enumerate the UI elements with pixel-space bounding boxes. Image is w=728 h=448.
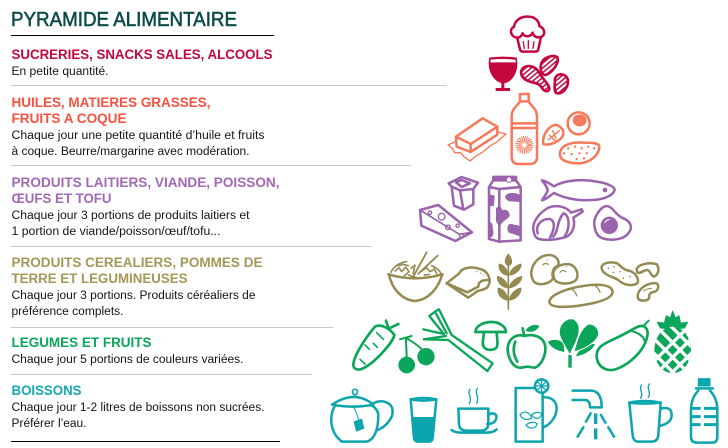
text: boissons <box>12 402 264 430</box>
panel: boissons <box>12 383 264 430</box>
icons: huiles tier <box>448 94 599 164</box>
text: produits laitiers <box>12 210 250 238</box>
text: cereales: Chaque jour 3 portions. Produits céréaliers de <box>12 290 256 302</box>
heading: huiles <box>12 95 210 126</box>
icons: sucreries tier <box>490 17 568 93</box>
icon: cupcake <box>511 17 544 52</box>
icon: teapot <box>331 389 393 442</box>
icon: baguette <box>549 285 613 307</box>
icon: bread <box>447 268 490 298</box>
icons: boissons tier right <box>573 379 717 443</box>
icon: rice bowl <box>388 252 442 301</box>
title: PYRAMIDE ALIMENTAIRE <box>11 9 237 31</box>
heading: sucreries: SUCRERIES, SNACKS SALES, ALCOOLS <box>12 47 272 62</box>
heading: produits laitiers: PRODUITS LAITIERS, VIANDE, POISSON, <box>12 175 280 190</box>
icons: boissons tier left <box>331 379 557 442</box>
text: cereales <box>12 290 256 318</box>
icon: cherries <box>398 336 435 373</box>
heading: legumes: LEGUMES ET FRUITS <box>12 335 152 350</box>
icon: cheese <box>420 205 472 241</box>
text: huiles <box>12 130 265 158</box>
heading: cereales: PRODUITS CEREALIERS, POMMES DE <box>12 255 262 270</box>
icons: cereales tier <box>447 254 658 309</box>
panel: sucreries <box>12 47 272 78</box>
icon: butter <box>448 118 506 161</box>
text: sucreries: En petite quantité. <box>12 66 109 78</box>
icon: brazil nut <box>560 142 599 163</box>
icon: wheat <box>498 254 522 309</box>
heading: huiles: HUILES, MATIERES GRASSES, <box>12 95 210 110</box>
text: produits laitiers: Chaque jour 3 portions de produits laitiers et <box>12 210 250 222</box>
icon: hazelnut <box>568 112 590 134</box>
heading: cereales <box>12 255 262 286</box>
text: produits laitiers: 1 portion de viande/poisson/œuf/tofu... <box>12 226 220 238</box>
heading: boissons: BOISSONS <box>12 383 82 398</box>
text: boissons: Chaque jour 1-2 litres de boissons non sucrées. <box>12 402 264 414</box>
panel: legumes <box>12 335 244 366</box>
icon: jug <box>516 379 557 442</box>
text: boissons: Préférer l’eau. <box>12 418 86 430</box>
icon: leek <box>423 309 493 371</box>
icon: fish <box>542 180 615 200</box>
icons: legumes tier right <box>548 310 691 374</box>
panel: produits laitiers <box>12 175 280 238</box>
text: huiles: Chaque jour une petite quantité d’huile et fruits <box>12 130 265 142</box>
icon: water bottle <box>691 379 717 443</box>
heading: cereales: TERRE ET LEGUMINEUSES <box>12 271 188 286</box>
icon: pineapple <box>654 310 691 374</box>
icon: carrot <box>353 321 398 370</box>
text: cereales: préférence complets. <box>12 306 124 318</box>
icon: egg <box>594 206 631 240</box>
icon: apple <box>508 325 545 368</box>
icon: cashews <box>637 263 658 301</box>
icon: yogurt <box>449 177 478 210</box>
icon: almond <box>543 125 563 145</box>
icon: wine glass <box>490 57 516 91</box>
icon: milk carton <box>489 177 521 242</box>
icon: crisps <box>521 56 568 93</box>
icon: cup <box>452 389 497 433</box>
icon: faucet <box>573 391 614 439</box>
icon: potatoes <box>531 255 577 284</box>
heading: huiles: FRUITS A COQUE <box>12 111 126 126</box>
panel: cereales <box>12 255 262 318</box>
icon: glass <box>411 398 436 442</box>
heading: produits laitiers: ŒUFS ET TOFU <box>12 191 112 206</box>
text: legumes: Chaque jour 5 portions de couleurs variées. <box>12 354 244 366</box>
icon: meat <box>533 206 583 240</box>
panel: huiles <box>12 95 265 158</box>
icon: mug <box>629 384 672 442</box>
icon: eggplant <box>597 321 649 370</box>
icons: produits laitiers tier <box>420 177 631 242</box>
icon: spinach <box>547 319 599 368</box>
icon: peanut <box>602 262 638 285</box>
heading: produits laitiers <box>12 175 280 206</box>
icon: mushroom <box>475 322 506 350</box>
text: huiles: à coque. Beurre/margarine avec modération. <box>12 146 250 158</box>
icons: legumes tier left <box>353 309 545 373</box>
icon: oil bottle <box>512 94 537 164</box>
